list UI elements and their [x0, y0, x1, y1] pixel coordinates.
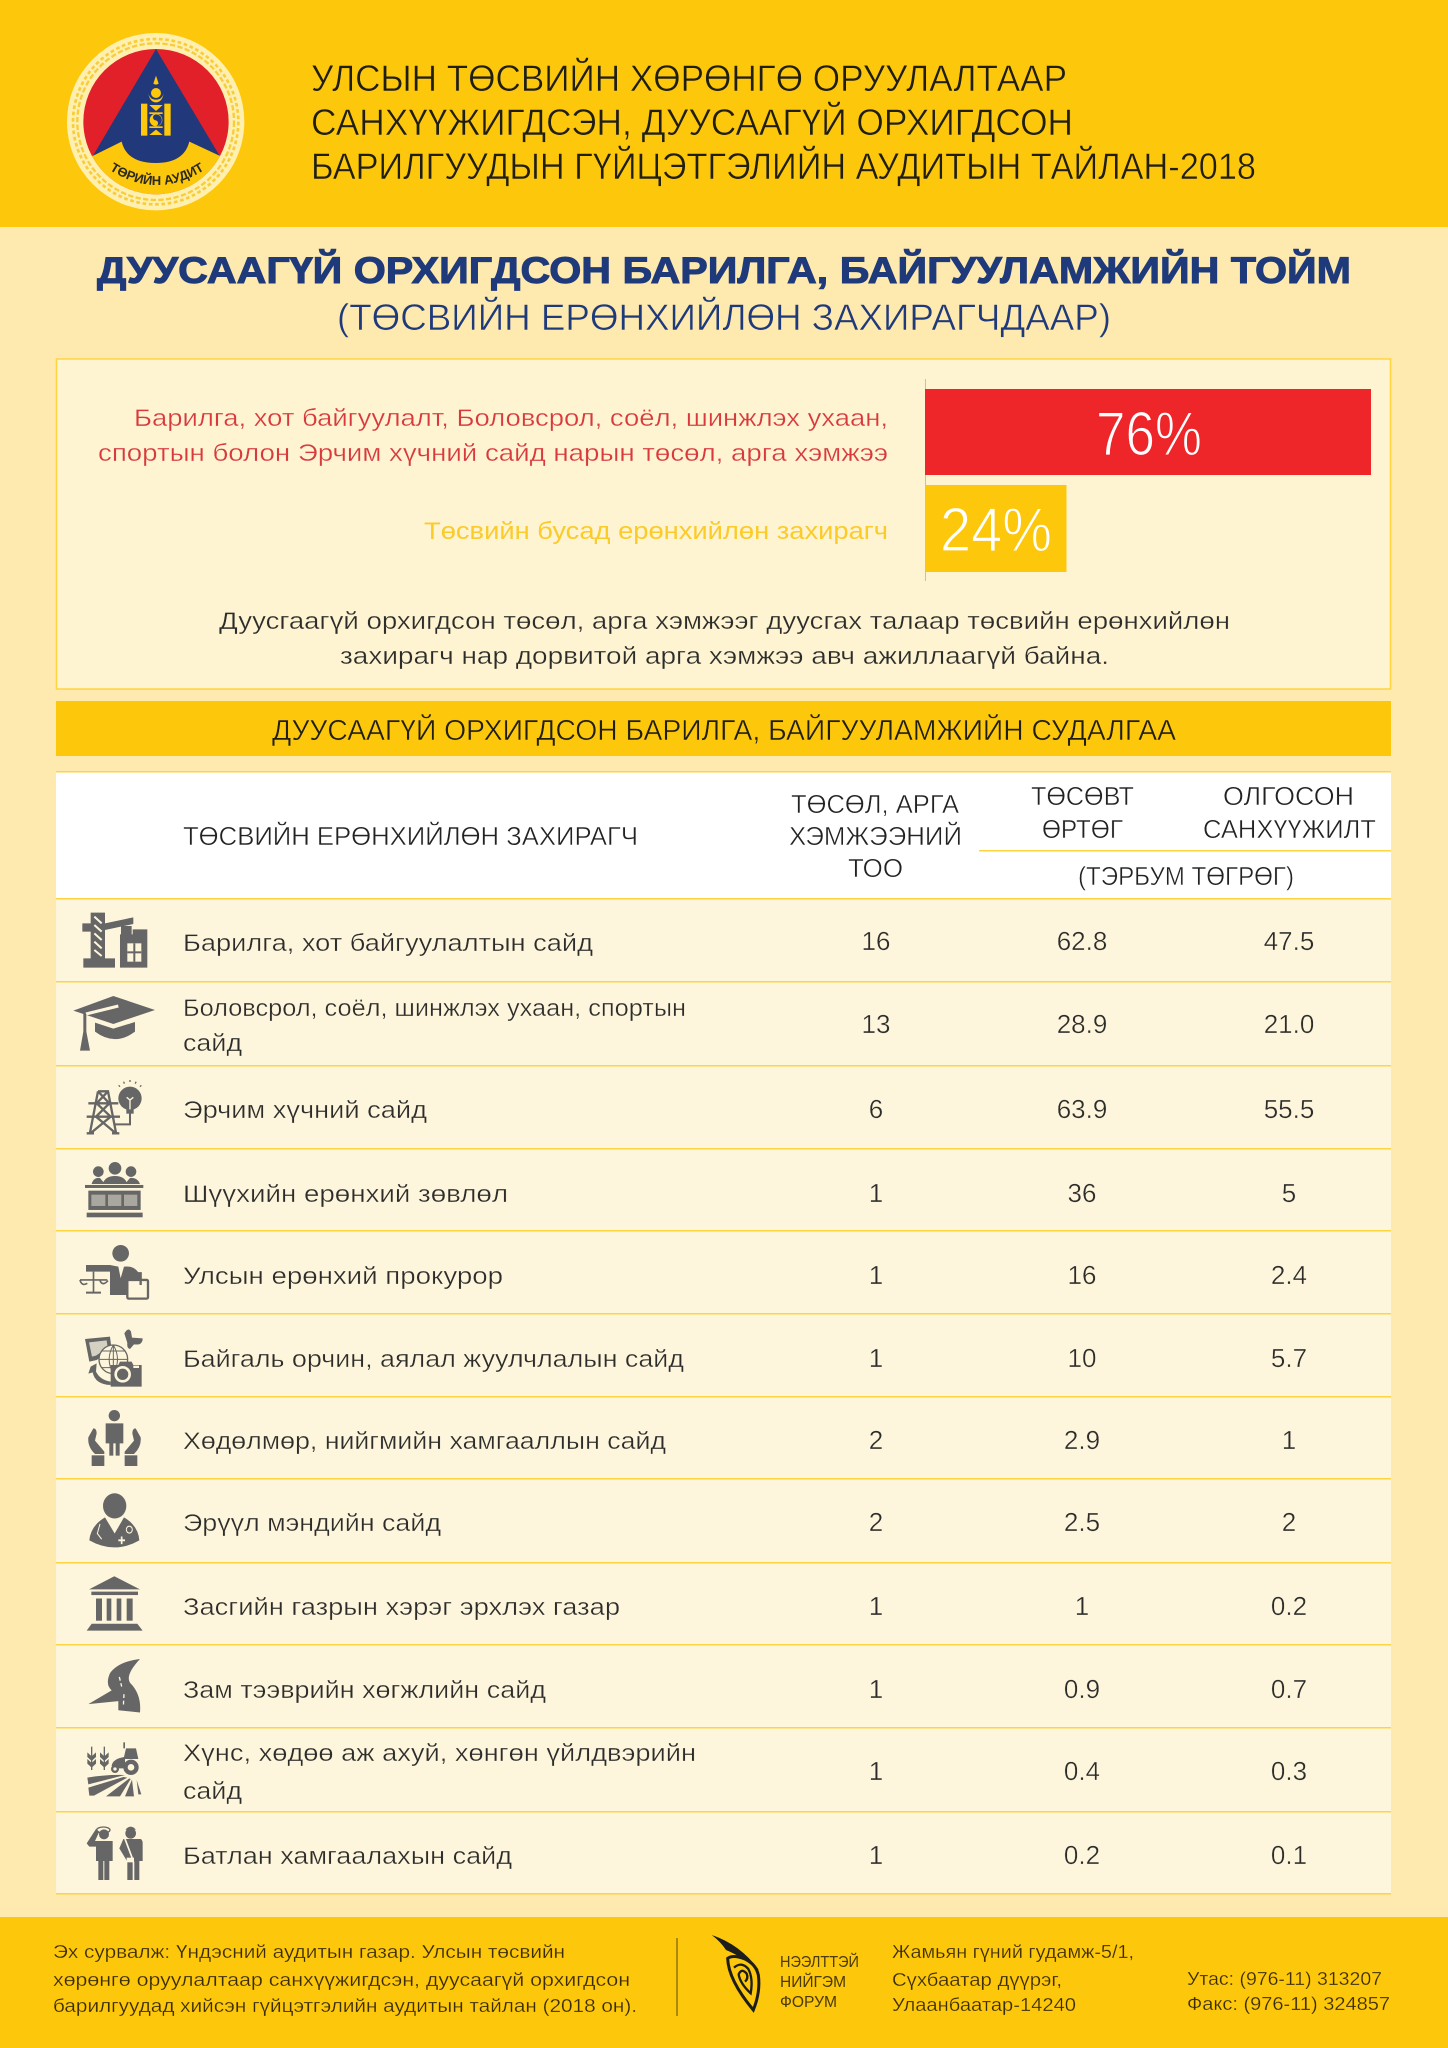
address: [892, 1941, 1134, 2015]
row: construction: 62.8: [1057, 926, 1107, 956]
emblem: soyombo: [141, 76, 171, 136]
row: food and agriculture: сайд: [183, 1778, 242, 1805]
row: defence: 1: [869, 1840, 883, 1870]
icon: crane and building: [82, 913, 147, 968]
red bar label: Барилга, хот байгуулалт, Боловсрол, соёл, шинжлэх ухаан,: [134, 405, 888, 432]
row: supreme court council: 1: [869, 1178, 883, 1208]
overview note: [219, 608, 1230, 670]
row: supreme court council: [85, 1162, 1296, 1217]
row: environment and tourism: Байгаль орчин, аялал жуулчлалын сайд: [183, 1346, 684, 1373]
row: energy: 6: [869, 1094, 883, 1124]
row: health: 2.5: [1064, 1507, 1100, 1537]
bar: 76%: 76%: [1096, 400, 1202, 469]
row: education: 21.0: [1264, 1009, 1314, 1039]
report title: УЛСЫН ТӨСВИЙН ХӨРӨНГӨ ОРУУЛАЛТААР: [311, 57, 1067, 99]
row: health: [89, 1493, 1296, 1547]
row: environment and tourism: [85, 1330, 1307, 1387]
row: defence: [87, 1827, 1307, 1880]
row: environment and tourism: 1: [869, 1343, 883, 1373]
emblem: swirl: [712, 1935, 759, 2010]
footer band: [0, 1917, 1448, 2048]
phone and fax: Факс: (976-11) 324857: [1187, 1993, 1390, 2014]
row: labour and social protection: Хөдөлмөр, нийгмийн хамгааллын сайд: [183, 1428, 666, 1455]
report title: САНХҮҮЖИГДСЭН, ДУУСААГҮЙ ОРХИГДСОН: [311, 101, 1073, 143]
row: defence: 0.1: [1271, 1840, 1307, 1870]
section heading: (ТӨСВИЙН ЕРӨНХИЙЛӨН ЗАХИРАГЧДААР): [337, 296, 1111, 338]
red bar label: спортын болон Эрчим хүчний сайд нарын төсөл, арга хэмжээ: [98, 440, 888, 467]
row: environment and tourism: 5.7: [1271, 1343, 1307, 1373]
icon: soldiers saluting: [87, 1827, 143, 1880]
row: food and agriculture: 0.4: [1064, 1756, 1100, 1786]
row: defence: 0.2: [1064, 1840, 1100, 1870]
header band: [0, 0, 1448, 227]
yellow bar label: Төсвийн бусад ерөнхийлөн захирагч: [424, 518, 888, 545]
row: roads and transport: Зам тээврийн хөгжлийн сайд: [183, 1677, 546, 1704]
row: prosecutor: Улсын ерөнхий прокурор: [183, 1263, 503, 1290]
icon: tractor and field: [87, 1742, 141, 1796]
table header: ОЛГОСОН: [1223, 781, 1354, 811]
source note: барилгуудад хийсэн гүйцэтгэлийн аудитын тайлан (2018 он).: [53, 1995, 637, 2016]
phone and fax: [1187, 1968, 1390, 2014]
icon: judges behind bench: [85, 1162, 143, 1217]
logo: open society forum: ФОРУМ: [780, 1994, 837, 2011]
row: supreme court council: 5: [1282, 1178, 1296, 1208]
address: Улаанбаатар-14240: [892, 1994, 1076, 2015]
row: health: 2: [1282, 1507, 1296, 1537]
row: education: сайд: [183, 1030, 242, 1057]
section heading: ДУУСААГҮЙ ОРХИГДСОН БАРИЛГА, БАЙГУУЛАМЖИЙН ТОЙМ: [97, 249, 1351, 291]
row: construction: [82, 913, 1314, 968]
bar: 24%: [925, 485, 1066, 572]
row: construction: Барилга, хот байгуулалтын сайд: [183, 930, 593, 957]
logo: open society forum: [712, 1935, 859, 2011]
logo: state audit emblem: [67, 33, 244, 210]
row: roads and transport: 0.7: [1271, 1674, 1307, 1704]
icon: winding road: [88, 1659, 140, 1713]
row: roads and transport: [88, 1659, 1307, 1713]
study band heading: [56, 701, 1391, 756]
logo: open society forum: НЭЭЛТТЭЙ: [780, 1953, 859, 1971]
icon: graduation cap: [73, 996, 155, 1051]
row: food and agriculture: [87, 1740, 1307, 1805]
row: food and agriculture: Хүнс, хөдөө аж ахуй, хөнгөн үйлдвэрийн: [183, 1740, 696, 1767]
table header: ТӨСВИЙН ЕРӨНХИЙЛӨН ЗАХИРАГЧ: [183, 821, 638, 851]
row: construction: 47.5: [1264, 926, 1314, 956]
row: environment and tourism: 10: [1068, 1343, 1096, 1373]
row: health: Эрүүл мэндийн сайд: [183, 1510, 441, 1537]
logo: state audit emblem: ТӨРИЙН АУДИТ: [112, 162, 202, 185]
source note: Эх сурвалж: Үндэсний аудитын газар. Улсын төсвийн: [53, 1941, 565, 1962]
row: prosecutor: 1: [869, 1260, 883, 1290]
icon: globe, camera and butterfly: [85, 1330, 143, 1387]
row: cabinet secretariat: Засгийн газрын хэрэг эрхлэх газар: [183, 1594, 620, 1621]
row: labour and social protection: 2: [869, 1425, 883, 1455]
table rows background: [56, 898, 1391, 1894]
row: energy: Эрчим хүчний сайд: [183, 1097, 427, 1124]
row: construction: 16: [862, 926, 890, 956]
row: roads and transport: 0.9: [1064, 1674, 1100, 1704]
bar: 24%: 24%: [940, 496, 1052, 565]
table header: [56, 771, 1391, 898]
row: labour and social protection: [88, 1410, 1296, 1466]
red bar label: [98, 405, 888, 467]
section heading: [97, 249, 1351, 338]
table header: ХЭМЖЭЭНИЙ: [789, 821, 962, 851]
row: health: 2: [869, 1507, 883, 1537]
row: supreme court council: Шүүхийн ерөнхий зөвлөл: [183, 1181, 508, 1208]
row: cabinet secretariat: [87, 1576, 1307, 1631]
row: education: Боловсрол, соёл, шинжлэх ухаан, спортын: [183, 995, 686, 1022]
icon: government building: [87, 1576, 143, 1631]
row: prosecutor: 16: [1068, 1260, 1096, 1290]
row: cabinet secretariat: 1: [1075, 1591, 1089, 1621]
overview note: Дуусгаагүй орхигдсон төсөл, арга хэмжээг дуусгах талаар төсвийн ерөнхийлөн: [219, 608, 1230, 635]
table header: ТОО: [848, 853, 903, 883]
bar: 76%: [925, 389, 1371, 475]
overview note: захирагч нар дорвитой арга хэмжээ авч ажиллаагүй байна.: [340, 643, 1109, 670]
table header: ТӨСӨВТ: [1031, 781, 1134, 811]
logo: open society forum: НИЙГЭМ: [780, 1973, 846, 1991]
row: labour and social protection: 2.9: [1064, 1425, 1100, 1455]
study band heading: ДУУСААГҮЙ ОРХИГДСОН БАРИЛГА, БАЙГУУЛАМЖИЙН СУДАЛГАА: [272, 713, 1177, 747]
row: cabinet secretariat: 0.2: [1271, 1591, 1307, 1621]
row: defence: Батлан хамгаалахын сайд: [183, 1843, 512, 1870]
row: prosecutor: 2.4: [1271, 1260, 1307, 1290]
source note: хөрөнгө оруулалтаар санхүүжигдсэн, дуусаагүй орхигдсон: [53, 1969, 630, 1990]
row: food and agriculture: 0.3: [1271, 1756, 1307, 1786]
icon: person in caring hands: [88, 1410, 141, 1466]
row: labour and social protection: 1: [1282, 1425, 1296, 1455]
row: cabinet secretariat: 1: [869, 1591, 883, 1621]
row: energy: 55.5: [1264, 1094, 1314, 1124]
icon: power tower and bulb: [87, 1080, 142, 1133]
report title: БАРИЛГУУДЫН ГҮЙЦЭТГЭЛИЙН АУДИТЫН ТАЙЛАН-2018: [311, 145, 1256, 187]
icon: prosecutor with scales: [80, 1245, 148, 1299]
row: education: 28.9: [1057, 1009, 1107, 1039]
report title: [311, 57, 1256, 187]
table: [56, 771, 1391, 1894]
row: energy: 63.9: [1057, 1094, 1107, 1124]
panel: overview bars: [56, 359, 1390, 689]
table header: ӨРТӨГ: [1042, 814, 1123, 844]
row: food and agriculture: 1: [869, 1756, 883, 1786]
row: education: [73, 995, 1314, 1057]
table header: (ТЭРБУМ ТӨГРӨГ): [1078, 861, 1294, 891]
row: supreme court council: 36: [1068, 1178, 1096, 1208]
phone and fax: Утас: (976-11) 313207: [1187, 1968, 1382, 1989]
row: roads and transport: 1: [869, 1674, 883, 1704]
table header: ТӨСӨЛ, АРГА: [791, 789, 960, 819]
row: education: 13: [862, 1009, 890, 1039]
source note: [53, 1941, 637, 2016]
row: prosecutor: [80, 1245, 1307, 1299]
icon: doctor: [89, 1493, 139, 1547]
row: energy: [87, 1080, 1314, 1133]
table header: САНХҮҮЖИЛТ: [1203, 814, 1376, 844]
address: Сүхбаатар дүүрэг,: [892, 1969, 1062, 1990]
address: Жамьян гүний гудамж-5/1,: [892, 1941, 1134, 1962]
